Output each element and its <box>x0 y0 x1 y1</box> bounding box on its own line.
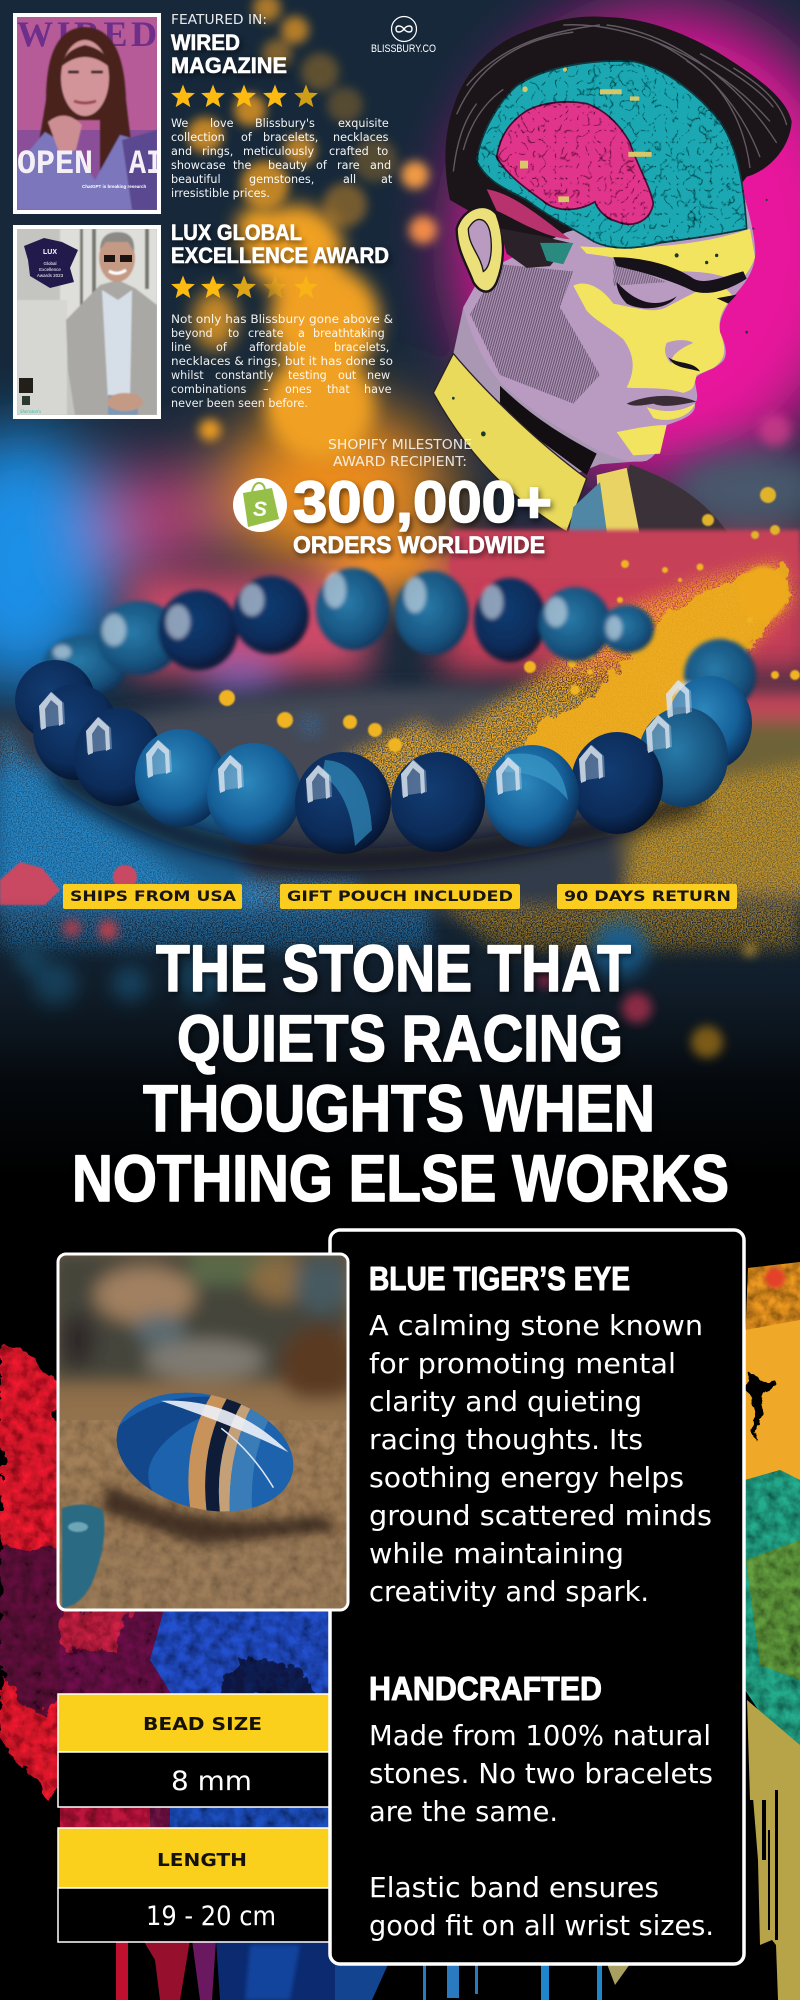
review paragraph: a <box>298 327 305 340</box>
spec table: length: LENGTH <box>157 1850 247 1871</box>
stone body <box>100 1371 307 1532</box>
magazine cover: Lux award: LUX <box>43 249 57 256</box>
heading: Wired Magazine: WIRED <box>171 30 240 55</box>
review paragraph: Not only has Blissbury gone above & <box>171 313 393 326</box>
illustration: man with exposed brain <box>433 17 792 536</box>
review paragraph: bracelets, <box>334 341 389 354</box>
review paragraph: never been seen before. <box>171 397 308 410</box>
review paragraph: testing <box>288 369 327 382</box>
label: award recipient: AWARD RECIPIENT: <box>333 455 467 470</box>
review paragraph: crafted <box>329 145 369 158</box>
body: stone description <box>369 1309 712 1608</box>
review paragraph: Blissbury's <box>255 117 315 130</box>
review paragraph: new <box>367 369 390 382</box>
review paragraph: constantly <box>215 369 274 382</box>
label: featured in: FEATURED IN: <box>171 13 267 28</box>
body: handcrafted details: good fit on all wrist sizes. <box>369 1909 714 1942</box>
man head <box>99 234 135 282</box>
review paragraph: bracelets, <box>263 131 318 144</box>
review paragraph: necklaces <box>333 131 389 144</box>
collar <box>433 354 587 532</box>
magazine cover: Lux award: Excellence <box>39 267 61 272</box>
spec table: length: 19 - 20 cm <box>146 1901 276 1932</box>
powder: yellow burst <box>219 560 800 950</box>
spec table: bead size <box>58 1694 332 1807</box>
body: stone description: clarity and quieting <box>369 1385 642 1418</box>
review paragraph: at <box>381 173 393 186</box>
review paragraph: to <box>377 145 388 158</box>
background: colour powder scene <box>0 0 800 1195</box>
body: stone description: creativity and spark. <box>369 1575 649 1608</box>
spec table: length <box>58 1828 332 1942</box>
man shirt <box>102 290 132 400</box>
heading: Lux Global Excellence Award <box>171 220 389 268</box>
review paragraph: the <box>233 159 251 172</box>
label: award recipient: SHOPIFY MILESTONE <box>328 438 472 453</box>
text block: Lux award feature <box>171 220 397 410</box>
spec table: bead size: BEAD SIZE <box>143 1714 262 1735</box>
magazine cover: Lux award <box>13 225 161 419</box>
body: stone description: for promoting mental <box>369 1347 676 1380</box>
icon: Shopify bag: S <box>253 498 267 521</box>
review paragraph: gemstones, <box>249 173 314 186</box>
paint splash: right orange, teal and yellow <box>745 1262 800 2000</box>
forehead highlight <box>580 229 755 282</box>
badge: ships from USA <box>63 884 242 909</box>
review paragraph: that <box>327 383 350 396</box>
review paragraph: all <box>343 173 356 186</box>
review paragraph: rare <box>337 159 360 172</box>
headline: OPEN <box>17 146 93 184</box>
review paragraph: and <box>171 145 192 158</box>
body: stone description: while maintaining <box>369 1537 624 1570</box>
magazine cover: Wired: ChatGPT is breaking research <box>82 184 147 189</box>
review paragraph: love <box>210 117 234 130</box>
bokeh lights <box>187 0 437 441</box>
face base <box>463 182 755 462</box>
magazine cover: Wired <box>13 13 163 214</box>
logo: Blissbury: BLISSBURY.CO <box>371 43 436 55</box>
nose <box>668 357 700 371</box>
title: QUIETS RACING <box>177 1001 623 1075</box>
body: handcrafted details: stones. No two bracelets <box>369 1757 713 1790</box>
review paragraph: whilst <box>171 369 204 382</box>
heading: Lux Global Excellence Award: LUX GLOBAL <box>171 220 302 245</box>
body: stone description: racing thoughts. Its <box>369 1423 643 1456</box>
heading: Lux Global Excellence Award: EXCELLENCE AWARD <box>171 243 389 268</box>
review paragraph: ones <box>285 383 312 396</box>
review paragraph: – <box>263 383 269 396</box>
review paragraph: rings, <box>202 145 233 158</box>
badge: gift pouch included <box>280 884 520 909</box>
star rating <box>171 276 318 298</box>
review paragraph: beyond <box>171 327 213 340</box>
review paragraph: of <box>316 159 328 172</box>
badge: ships from USA: SHIPS FROM USA <box>70 889 236 905</box>
brow <box>613 257 747 293</box>
back row beads <box>43 568 756 711</box>
photo: polished blue tiger's eye stone <box>50 1250 360 1615</box>
review paragraph: combinations <box>171 383 246 396</box>
review paragraph: We <box>171 117 188 130</box>
star rating <box>171 84 318 107</box>
review paragraph: of <box>216 341 228 354</box>
review paragraph: beauty <box>268 159 307 172</box>
jacket <box>628 464 726 532</box>
red table band below portrait <box>450 530 800 580</box>
review paragraph: to <box>228 327 239 340</box>
woman hair <box>38 26 132 171</box>
eyes <box>617 282 677 308</box>
bracelet shadow <box>60 770 700 860</box>
mouth <box>627 396 697 406</box>
man blazer <box>66 280 157 415</box>
paint splash: left red and blue <box>0 1350 340 1830</box>
spec table: bead size: 8 mm <box>171 1766 252 1797</box>
title: THE STONE THAT <box>156 931 631 1005</box>
body: handcrafted details <box>369 1719 714 1942</box>
label: award recipient <box>328 438 472 470</box>
brain teal <box>477 61 747 248</box>
caption: ORDERS WORLDWIDE <box>293 532 545 559</box>
review paragraph: necklaces & rings, but it has done so <box>171 355 393 368</box>
review paragraph: showcase <box>171 159 226 172</box>
masthead: WIRED <box>17 14 157 54</box>
neck <box>453 307 647 475</box>
milestone: Shopify orders <box>233 438 552 559</box>
review paragraph: meticulously <box>243 145 314 158</box>
logo: Blissbury <box>371 16 436 55</box>
review paragraph: collection <box>171 131 225 144</box>
badge: 90 days return <box>557 884 737 909</box>
ear <box>457 207 503 292</box>
badge: 90 days return: 90 DAYS RETURN <box>564 889 731 905</box>
title: THOUGHTS WHEN <box>143 1071 655 1145</box>
text block: Wired feature <box>171 13 396 200</box>
body: stone description: ground scattered minds <box>369 1499 712 1532</box>
background: blurred foreground powder <box>16 922 648 1007</box>
panel: product description card <box>330 1230 744 1964</box>
review paragraph: have <box>364 383 392 396</box>
body: handcrafted details: are the same. <box>369 1795 558 1828</box>
neck and temple hatching <box>470 264 600 404</box>
sponsor logos <box>19 378 33 393</box>
woman face <box>61 40 109 116</box>
brain pink lobe <box>497 102 653 224</box>
ground texture <box>58 1420 348 1610</box>
badge <box>24 238 78 288</box>
woman jacket and hand <box>17 131 132 210</box>
jaw shadow <box>500 386 597 475</box>
bracelet of blue tiger's eye beads <box>15 568 756 860</box>
body: stone description: soothing energy helps <box>369 1461 684 1494</box>
heading: Handcrafted: HANDCRAFTED <box>369 1670 602 1707</box>
review paragraph: exquisite <box>338 117 389 130</box>
front row beads <box>15 660 752 854</box>
tie <box>568 482 607 536</box>
brain circuit chips <box>520 67 652 202</box>
review paragraph: irresistible prices. <box>171 187 270 200</box>
review paragraph: beautiful <box>171 173 221 186</box>
magazine cover: Lux award: Sheraton's <box>20 410 41 415</box>
ink splatter <box>452 199 768 436</box>
fade to black behind the title <box>0 895 800 1200</box>
magazine cover: Wired: AI <box>129 146 163 184</box>
magazine cover: Lux award: Awards 2023 <box>37 273 64 278</box>
man hands <box>107 393 143 411</box>
review paragraph: line <box>171 341 191 354</box>
heading: Wired Magazine: MAGAZINE <box>171 53 287 78</box>
icon: Shopify bag <box>233 478 287 532</box>
review paragraph: breathtaking <box>313 327 385 340</box>
body: handcrafted details: Made from 100% natural <box>369 1719 711 1752</box>
body: handcrafted details: Elastic band ensures <box>369 1871 659 1904</box>
review paragraph: affordable <box>249 341 306 354</box>
review paragraph: out <box>338 369 357 382</box>
heading: Blue Tiger's Eye: BLUE TIGER’S EYE <box>369 1260 630 1297</box>
title <box>72 931 729 1215</box>
review paragraph: and <box>370 159 391 172</box>
body: stone description: A calming stone known <box>369 1309 703 1342</box>
chin highlight <box>617 425 667 455</box>
brain muscle strands <box>487 189 570 239</box>
cheek highlight <box>573 282 733 393</box>
review paragraph: of <box>241 131 253 144</box>
powder: blue ground <box>0 716 430 950</box>
magazine cover: Lux award: Global <box>43 261 57 266</box>
big number: 300,000+ <box>293 470 552 535</box>
hair <box>445 17 792 246</box>
paint drips: bottom <box>116 1940 630 2000</box>
heading: Wired Magazine <box>171 30 287 78</box>
review paragraph: create <box>248 327 284 340</box>
small teal stone <box>62 1504 104 1608</box>
badge: gift pouch included: GIFT POUCH INCLUDED <box>287 889 513 905</box>
